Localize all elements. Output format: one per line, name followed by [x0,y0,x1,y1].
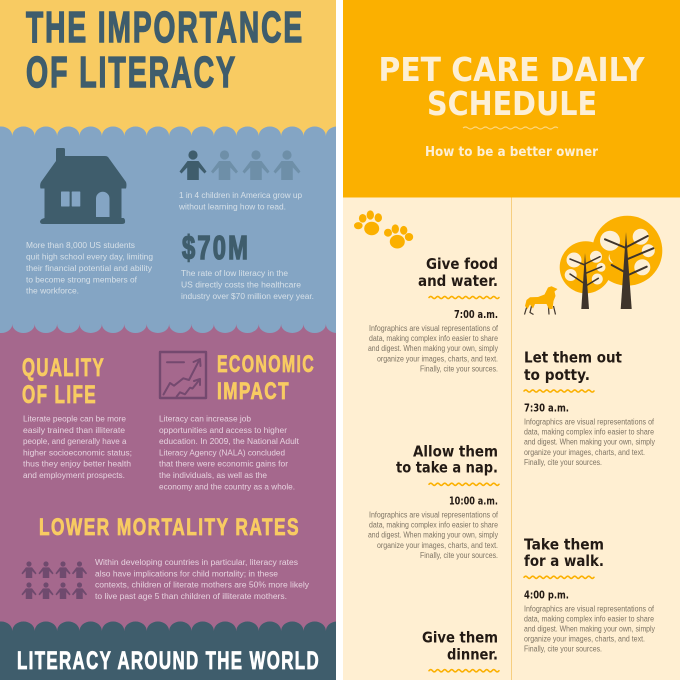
step: give food and water: 7:00 a.m. [454,308,498,321]
step: give food and water: Give food [426,255,498,273]
step: allow them to take a nap: Finally, cite your sources. [420,551,498,560]
text: one in four [178,191,303,212]
stat: 70 million dollars: $70M [182,229,250,266]
text: child mortality [95,558,309,601]
step: give food and water [368,255,499,374]
title: THE IMPORTANCE [26,3,304,52]
text: quality of life: Literate people can be more [23,414,127,424]
text: economic impact: Literacy can increase job [159,414,252,424]
step: let them out to potty: 7:30 a.m. [524,402,569,415]
step: allow them to take a nap: and digest. When making your own, simply [368,531,498,540]
step: take them for a walk: 4:00 p.m. [524,588,569,601]
step: let them out to potty [524,349,655,467]
step: allow them to take a nap: Infographics are visual representations of [369,511,499,520]
step: take them for a walk: and digest. When making your own, simply [524,624,655,633]
text: quality of life: easily trained than illiterate [23,426,126,435]
icon: one in four children [180,150,300,180]
step: let them out to potty: to potty. [524,366,590,384]
text: quality of life: thus they enjoy better health [23,460,131,469]
panel: quality, economic impact and mortality [0,320,336,640]
step: give food and water: organize your images, charts, and text. [377,354,498,364]
text: economic impact: that there were economic gains for [159,460,288,469]
step: give them dinner: Give them [422,629,498,647]
step: give food and water: and digest. When making your own, simply [368,344,498,353]
icon: trees [560,216,662,309]
panel: pet care header [343,0,680,198]
text: high school dropouts: to become strong members of [26,275,138,284]
text: economic impact: opportunities and access to higher [159,426,287,435]
heading: economic impact: IMPACT [217,378,290,405]
text: quality of life: higher socioeconomic status; [23,448,132,457]
text: economic impact [159,414,300,491]
step: allow them to take a nap: 10:00 a.m. [449,495,498,508]
title: PET CARE DAILY [378,51,645,89]
step: take them for a walk: data, making complex info easier to share [524,614,654,623]
text: child mortality: contexts, children of literate mothers are 50% more likely [95,581,309,590]
step: give food and water: and water. [418,272,498,290]
text: healthcare cost: industry over $70 million every year. [181,292,314,301]
icon: paw prints [354,210,413,248]
panel: literacy around the world [0,622,348,680]
panel: literacy statistics [0,126,348,333]
panel: schedule [343,198,680,680]
step: take them for a walk: Finally, cite your sources. [524,645,602,654]
step: take them for a walk [524,535,655,654]
step: give them dinner [422,629,499,672]
text: child mortality: to live past age 5 than children of illiterate mothers. [95,592,287,601]
text: healthcare cost: The rate of low literacy in the [181,269,289,278]
text: child mortality: also have implications for child mortality; in these [95,569,279,578]
step: give food and water: Finally, cite your sources. [420,364,498,374]
text: high school dropouts [26,241,153,296]
icon: dog [524,286,558,314]
text: high school dropouts: More than 8,000 US students [26,241,135,250]
text: economic impact: economy and the country as a whole. [159,482,295,491]
text: child mortality: Within developing countries in particular, literacy rates [95,558,298,567]
heading: literacy around the world: LITERACY AROUND THE WORLD [17,647,320,675]
step: let them out to potty: organize your images, charts, and text. [524,448,645,457]
title: SCHEDULE [427,85,597,123]
step: allow them to take a nap [368,442,499,560]
title [26,3,304,97]
title: OF LITERACY [26,48,237,97]
text: quality of life: and employment prospects. [23,471,125,480]
text: high school dropouts: the workforce. [26,287,79,296]
text: healthcare cost: US directly costs the healthcare [181,280,302,290]
title [378,51,645,123]
text: one in four: 1 in 4 children in America grow up [179,191,303,200]
text: economic impact: education. In 2009, the National Adult [159,437,300,446]
step: let them out to potty: Let them out [524,349,622,367]
step: take them for a walk: organize your images, charts, and text. [524,635,645,644]
step: let them out to potty: Infographics are visual representations of [524,418,655,427]
icon: rising chart [160,352,206,398]
step: allow them to take a nap: to take a nap. [396,459,498,477]
heading: economic impact [217,351,315,405]
subtitle: How to be a better owner [425,144,598,160]
text: one in four: without learning how to read. [178,202,286,212]
text: economic impact: Literacy Agency (NALA) concluded [159,448,285,457]
text: healthcare cost [181,269,314,301]
step: give food and water: data, making complex info easier to share [369,334,498,343]
icon: house [40,148,126,224]
heading: economic impact: ECONOMIC [217,351,315,378]
wavy divider [463,127,558,129]
heading: quality of life [22,354,105,409]
text: economic impact: the individuals, as well as the [159,471,268,480]
step: take them for a walk: Take them [524,535,604,553]
panel: literacy title header [0,0,336,140]
text: high school dropouts: quit high school every day, limiting [26,252,153,262]
text: quality of life: people, and generally have a [23,437,127,446]
step: allow them to take a nap: organize your images, charts, and text. [377,541,498,550]
text: quality of life [23,414,132,480]
step: give food and water: Infographics are visual representations of [369,324,499,333]
step: allow them to take a nap: Allow them [413,442,498,460]
icon: eight children [21,561,87,599]
heading: quality of life: QUALITY [22,354,105,382]
step: take them for a walk: for a walk. [524,552,604,570]
step: give them dinner: dinner. [447,645,498,663]
step: let them out to potty: Finally, cite your sources. [524,458,602,467]
text: high school dropouts: their financial potential and ability [26,264,152,273]
step: let them out to potty: and digest. When making your own, simply [524,438,655,447]
step: let them out to potty: data, making complex info easier to share [524,428,654,437]
step: take them for a walk: Infographics are visual representations of [524,604,655,613]
step: allow them to take a nap: data, making complex info easier to share [369,521,498,530]
heading: quality of life: OF LIFE [22,381,97,409]
heading: lower mortality rates: LOWER MORTALITY RATES [39,514,300,541]
